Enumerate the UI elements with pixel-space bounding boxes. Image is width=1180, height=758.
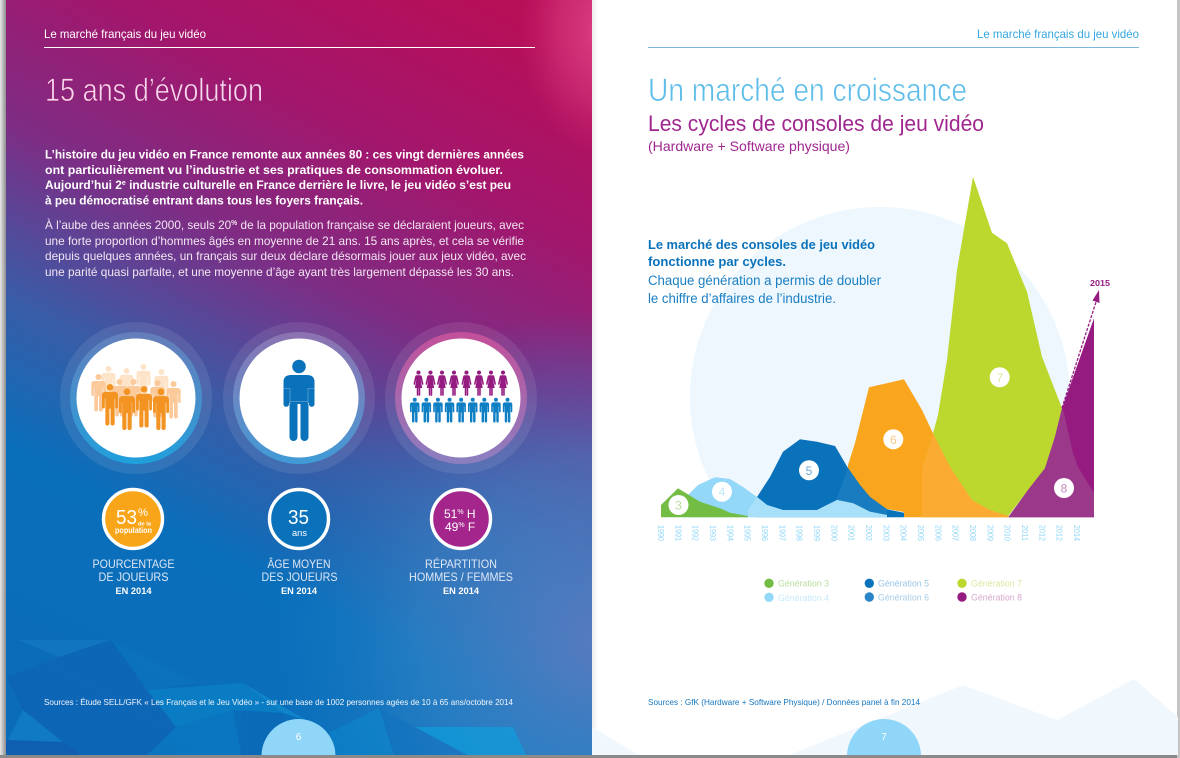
label: average age: ÂGE MOYEN [268,556,330,571]
stat: share of players: 53 [116,507,137,529]
icon: women and men split [385,322,537,474]
area: generation 6 overlap on 5 [836,468,887,517]
label: gender split [409,556,513,596]
stat: average age: 35 [288,507,309,529]
legend: Génération 3 [778,578,829,590]
year axis: 1999 [812,525,821,541]
running header: Le marché français du jeu vidéo [44,27,206,41]
body text: de la population française se déclaraient joueurs, avec [237,218,524,232]
callout [648,237,881,306]
area: generation 4 [688,477,887,517]
year axis: 1996 [760,525,769,541]
stat: gender split: % [458,522,465,529]
year axis: 2003 [881,525,890,541]
stat: share of players: % [138,507,148,519]
body text: une parité quasi parfaite, et une moyenne d’âge ayant très largement dépassé les 30 ans. [45,265,514,279]
intro text: Aujourd’hui 2 [45,178,122,192]
year axis: 2006 [933,525,942,541]
year axis: 1997 [777,525,786,541]
title: Un marché en croissance [648,72,967,108]
title: 15 ans d’évolution [45,72,263,108]
area: generation 8 [1008,318,1094,517]
callout: fonctionne par cycles. [648,254,786,269]
year axis: 2002 [864,525,873,541]
year axis: 2001 [847,525,856,541]
year axis: 2012 [1055,525,1064,541]
intro text [45,148,524,208]
legend: Génération 5 [878,578,929,590]
label: gender split: RÉPARTITION [425,556,497,571]
year axis: 2009 [985,525,994,541]
stat: average age: ans [292,528,308,538]
icon: crowd of players [60,322,212,474]
intro text: industrie culturelle en France derrière le livre, le jeu vidéo s’est peu [126,178,511,192]
year axis: 2008 [968,525,977,541]
year axis: 2010 [1003,525,1012,541]
year axis: 1991 [673,525,682,541]
marker 3 [668,495,688,515]
marker 4: 4 [719,485,726,499]
label: 2015: 2015 [1090,278,1110,288]
year axis: 2012 [1037,525,1046,541]
panel: right page [592,0,1178,758]
body text: % [231,220,238,227]
marker 6 [883,429,903,449]
label: share of players: DE JOUEURS [98,570,168,584]
stat: gender split: F [465,520,475,534]
low-poly background facets [592,679,1178,755]
year axis: 1995 [743,525,752,541]
body text [45,217,526,279]
year axis: 1998 [795,525,804,541]
marker 6: 6 [890,433,897,447]
stat: share of players: population [115,526,152,535]
year axis: 2011 [1020,525,1029,542]
legend: Génération 7 [971,578,1022,590]
area: generation 8 over 7 [1008,408,1094,517]
area: generation 5 [757,439,904,517]
arrow to 2015 [1062,290,1100,408]
year axis: 1990 [656,525,665,541]
marker 3: 3 [675,498,682,512]
stat: average age [270,490,328,548]
legend: Génération 4 [778,593,829,604]
label: average age: EN 2014 [281,586,317,596]
chart: console cycles [658,176,1110,541]
sources right: Sources : GfK (Hardware + Software Physique) / Données panel à fin 2014 [648,697,920,707]
year axis: 2007 [951,525,960,541]
page number 6: 6 [296,732,302,743]
stat: gender split [432,490,490,548]
subtitle: Les cycles de consoles de jeu vidéo [648,111,984,136]
year axis: 1993 [708,525,717,541]
year axis: 2004 [899,525,908,541]
year axis [656,525,1081,542]
stat: share of players: de la [138,522,152,528]
year axis: 1994 [725,525,734,541]
marker 8 [1054,478,1074,498]
low-poly background facets [6,640,526,755]
marker 7 [990,367,1010,387]
stat: gender split: H [464,507,476,521]
panel: left page [6,0,592,755]
year axis: 1992 [691,525,700,541]
marker 5 [799,460,819,480]
intro text: L’histoire du jeu vidéo en France remonte aux années 80 : ces vingt dernières années [45,148,524,162]
year axis: 2005 [916,525,925,541]
stat: gender split: % [457,509,464,516]
label: share of players: EN 2014 [116,586,152,596]
stat: share of players [104,490,162,548]
page number 7: 7 [881,732,887,743]
icon: average player [223,322,375,474]
body text: une forte proportion d’hommes âgés en moyenne de 21 ans. 15 ans après, et cela se vérifie [45,234,524,248]
marker 8: 8 [1061,482,1068,496]
callout: le chiffre d’affaires de l’industrie. [648,291,836,306]
legend: Génération 6 [878,592,929,604]
body text: À l’aube des années 2000, seuls 20 [45,218,235,232]
label: share of players: POURCENTAGE [92,557,174,571]
label: average age: DES JOUEURS [262,570,338,584]
area: generation 6 over 7 [922,433,1008,517]
seam shadow [592,0,596,728]
page number 6 [262,719,336,758]
stat: gender split: 51 [444,507,457,521]
callout: Chaque génération a permis de doubler [648,273,881,288]
area: generation 4 lighter lower band [748,497,887,517]
legend: Génération 8 [971,592,1022,604]
label: share of players [93,560,174,594]
label: average age [262,556,338,596]
body text: depuis quelques années, un français sur deux déclare désormais jouer aux jeux vidéo, avec [45,249,526,263]
label: gender split: HOMMES / FEMMES [409,570,513,584]
intro text: à peu démocratisé entrant dans tous les foyers français. [45,194,363,208]
running header: Le marché français du jeu vidéo [977,27,1139,41]
marker 5: 5 [806,464,813,478]
intro text: ont particulièrement vu l’industrie et ses pratiques de consommation évoluer. [45,163,503,177]
year axis: 2000 [829,525,838,541]
chart background circle [690,207,1070,518]
area: generation 6 [848,379,1008,517]
label: gender split: EN 2014 [443,586,479,596]
year axis: 2014 [1072,525,1081,541]
marker 7: 7 [996,371,1003,385]
area: generation 3 [661,488,748,517]
subtitle note: (Hardware + Software physique) [648,138,850,154]
marker 4 [712,482,732,502]
area: generation 7 [922,177,1062,517]
left page gradient background [6,0,592,755]
callout: Le marché des consoles de jeu vidéo [648,237,875,252]
intro text: e [122,180,126,187]
legend [764,578,1022,604]
sources left: Sources : Étude SELL/GFK « Les Français et le Jeu Vidéo » - sur une base de 1002 personnes agées de 10 à 65 ans/octobre 2014 [44,697,513,707]
page number 7 [847,719,921,758]
stat: gender split: 49 [445,520,458,534]
